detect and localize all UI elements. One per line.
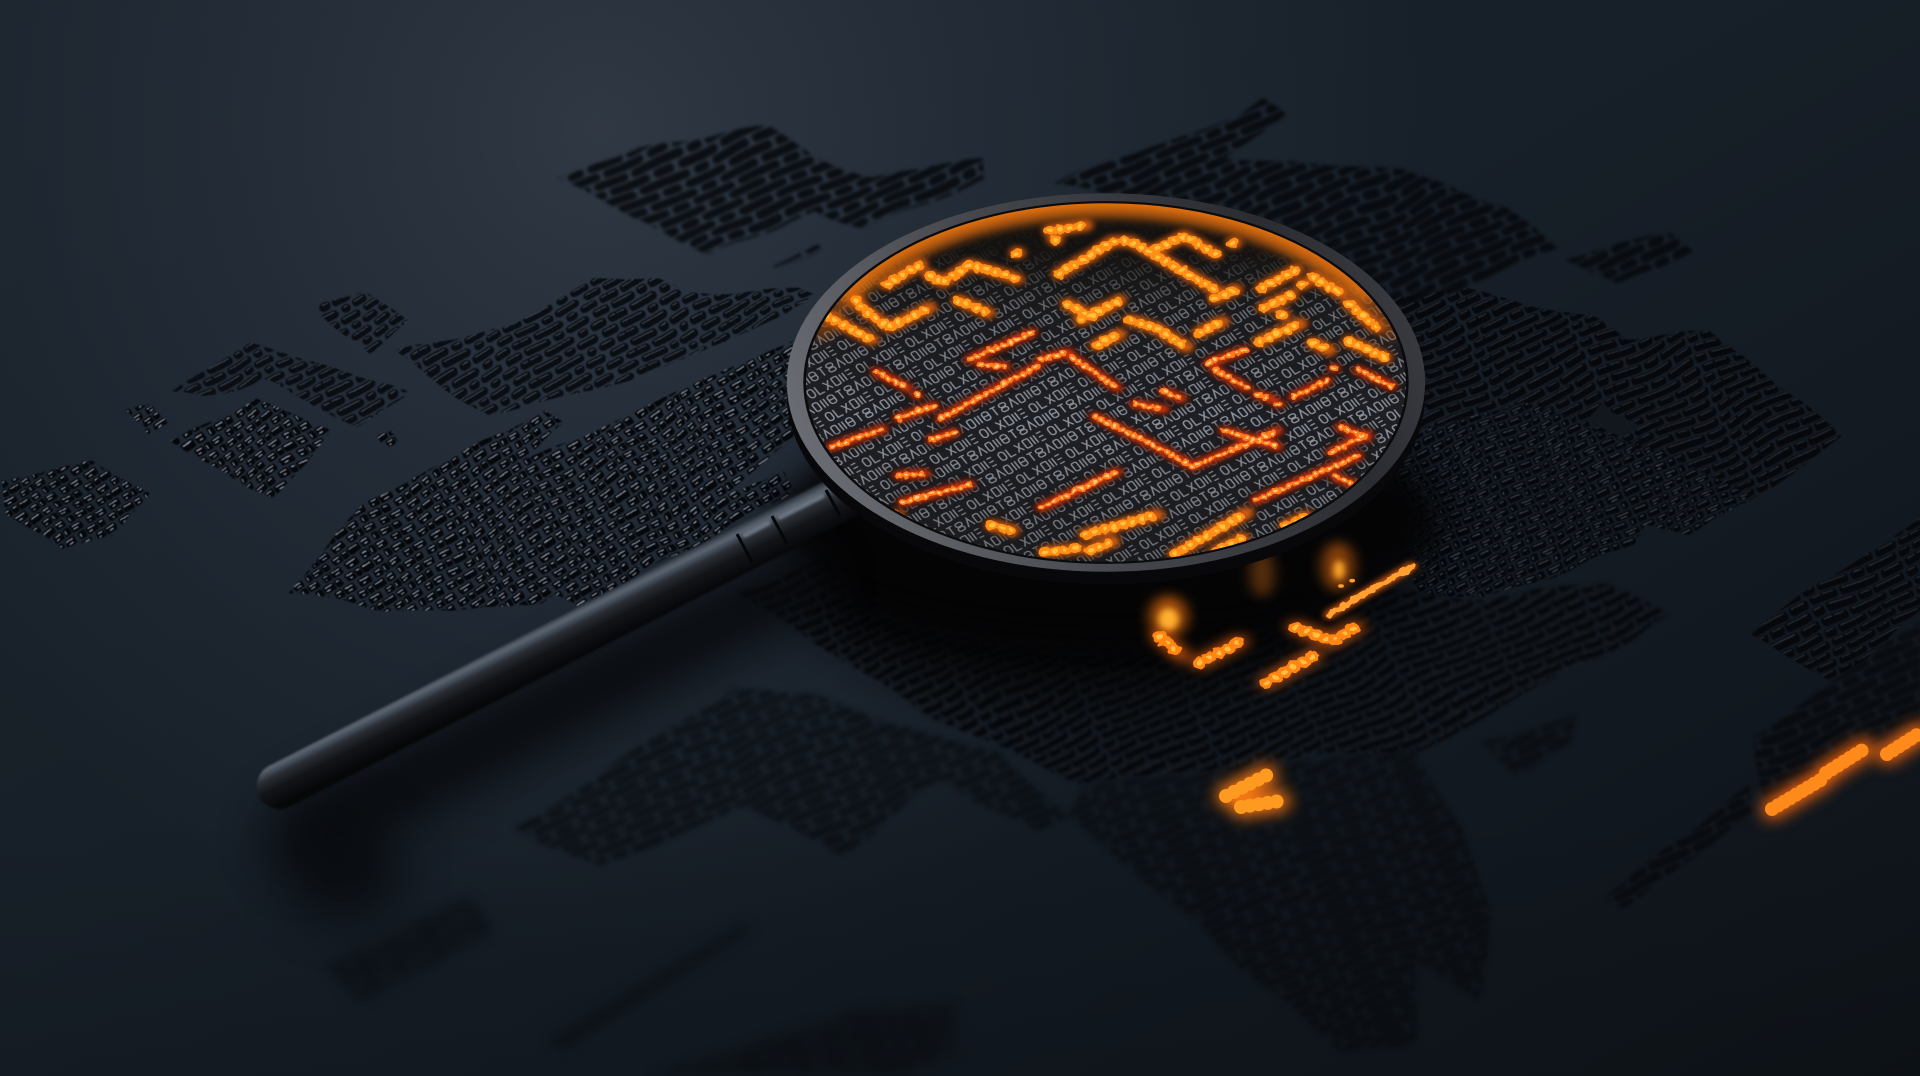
upper left text mass xyxy=(171,280,813,426)
right text mass: lower fine glyphs xyxy=(1385,400,1754,597)
magnifier lens xyxy=(787,191,1425,584)
collar highlights xyxy=(745,496,822,535)
glowing amber letters xyxy=(827,225,1385,554)
right text mass: upper bars xyxy=(1380,289,1843,498)
top darkening xyxy=(806,204,1406,562)
glowing red-orange letters xyxy=(831,332,1392,507)
glass contents xyxy=(806,203,1406,562)
lens body underside xyxy=(787,206,1425,584)
foreground very blurred text blocks xyxy=(325,897,955,1076)
left sharp text blocks xyxy=(0,335,808,612)
orange glowing fragments on the page xyxy=(1226,733,1920,809)
flame reflections xyxy=(1150,542,1354,637)
magnified text pattern xyxy=(806,252,1406,562)
shadow: magnifier cast shadow xyxy=(290,410,1440,920)
thin glowing word xyxy=(1329,566,1412,615)
orange edge glow xyxy=(840,203,1372,299)
under-lens and mid text masses xyxy=(738,548,1667,784)
metal rim xyxy=(787,193,1425,572)
lower blurred text masses xyxy=(514,686,1576,1050)
glowing letter beads xyxy=(1160,627,1356,682)
grip xyxy=(280,494,850,786)
orange glowing text below the lens xyxy=(1150,542,1412,682)
inner rim shadow xyxy=(805,202,1407,563)
dark halos behind lit letters xyxy=(827,225,1392,554)
collar separators xyxy=(737,490,840,562)
magnifier handle xyxy=(280,490,850,786)
far upper text blocks xyxy=(557,98,1696,330)
right edge text blocks xyxy=(1751,519,1920,681)
